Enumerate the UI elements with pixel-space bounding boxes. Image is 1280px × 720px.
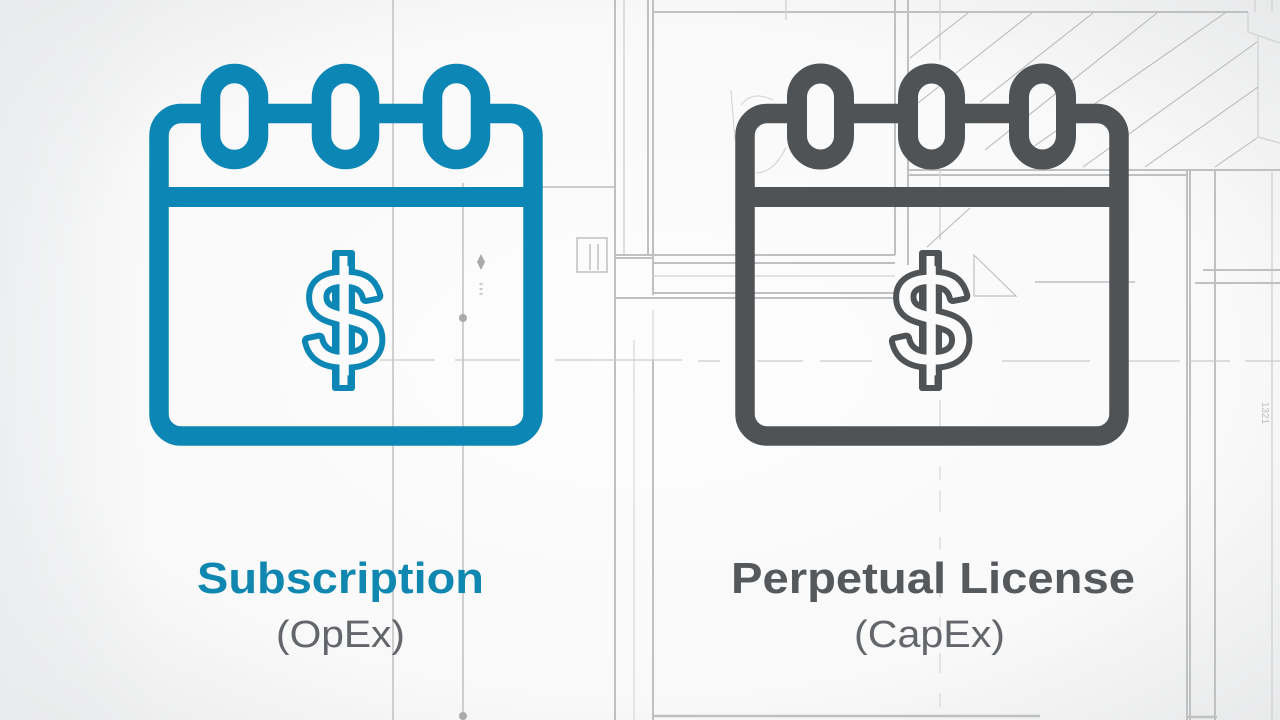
icon: subscription calendar: $ bbox=[306, 244, 382, 395]
icon: subscription calendar bbox=[159, 74, 533, 436]
label: CapEx: (CapEx) bbox=[854, 614, 1005, 656]
faint dimension label: 1321 bbox=[1259, 402, 1270, 425]
icon: perpetual license calendar: $ bbox=[893, 244, 969, 395]
heading: Subscription: Subscription bbox=[197, 554, 484, 603]
label: OpEx: (OpEx) bbox=[276, 614, 405, 656]
icon: perpetual license calendar: $ bbox=[893, 244, 969, 395]
heading: Perpetual License: Perpetual License bbox=[731, 554, 1135, 603]
icon: perpetual license calendar bbox=[745, 74, 1119, 436]
icon: subscription calendar: $ bbox=[306, 244, 382, 395]
